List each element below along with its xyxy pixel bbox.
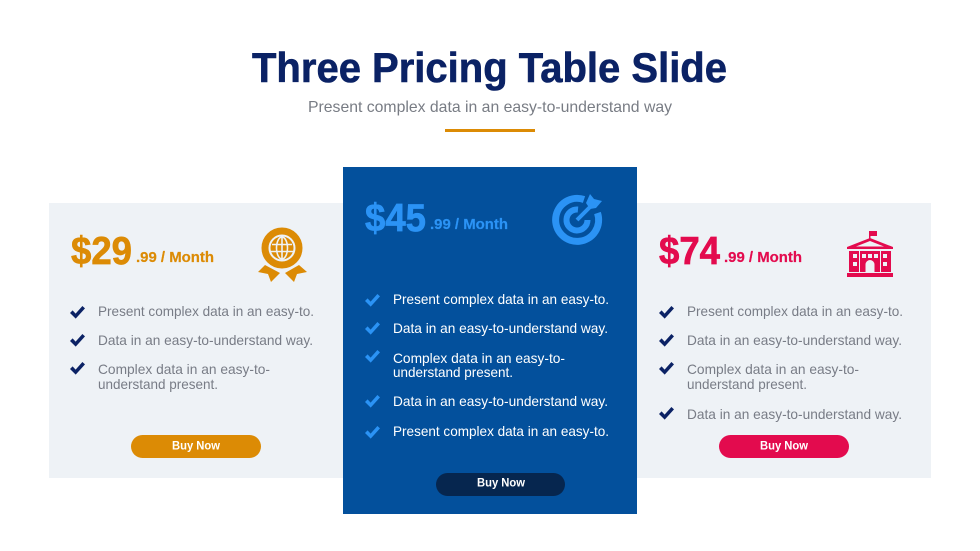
left buy button	[131, 435, 261, 458]
center feature list: Present complex data in an easy-to.	[393, 423, 609, 439]
panel: right pricing card	[635, 203, 931, 478]
left feature list: Present complex data in an easy-to.	[98, 303, 314, 319]
center price	[365, 197, 508, 240]
left feature list: understand present.	[98, 376, 218, 392]
left price: $29	[71, 230, 132, 273]
center feature list	[365, 291, 609, 439]
center buy button	[436, 473, 565, 496]
center feature list: Complex data in an easy-to-	[393, 350, 565, 366]
center price: .99 / Month	[430, 216, 508, 233]
center feature list: understand present.	[393, 364, 513, 380]
right buy button	[719, 435, 849, 458]
right feature list: Data in an easy-to-understand way.	[687, 406, 902, 422]
icon: school building	[847, 231, 893, 277]
accent underline	[445, 129, 535, 132]
right feature list: Complex data in an easy-to-	[687, 361, 859, 377]
left feature list	[70, 303, 314, 392]
panel: left pricing card	[49, 203, 345, 478]
icon: target with arrow	[556, 194, 602, 241]
right price	[659, 230, 802, 273]
center feature list: Data in an easy-to-understand way.	[393, 320, 608, 336]
center buy button: Buy Now	[477, 476, 526, 490]
left price: .99 / Month	[136, 249, 214, 266]
left feature list: Data in an easy-to-understand way.	[98, 332, 313, 348]
center price: $45	[365, 197, 426, 240]
center feature list: Data in an easy-to-understand way.	[393, 393, 608, 409]
right buy button: Buy Now	[760, 438, 809, 452]
subtitle: Present complex data in an easy-to-understand way	[308, 99, 672, 116]
right feature list: understand present.	[687, 376, 807, 392]
title: Three Pricing Table Slide	[252, 44, 727, 91]
right price: .99 / Month	[724, 249, 802, 266]
right price: $74	[659, 230, 720, 273]
center feature list: Present complex data in an easy-to.	[393, 291, 609, 307]
right feature list	[659, 303, 903, 422]
panel: center pricing card	[343, 167, 637, 514]
left feature list: Complex data in an easy-to-	[98, 361, 270, 377]
icon: award badge with globe	[258, 231, 307, 282]
left buy button: Buy Now	[172, 438, 221, 452]
left price	[71, 230, 214, 273]
right feature list: Data in an easy-to-understand way.	[687, 332, 902, 348]
right feature list: Present complex data in an easy-to.	[687, 303, 903, 319]
